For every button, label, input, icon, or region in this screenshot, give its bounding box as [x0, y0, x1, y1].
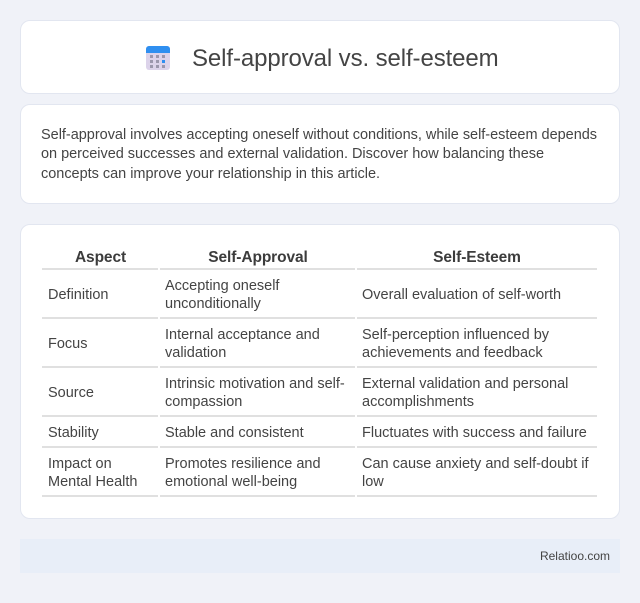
row: Source [48, 376, 568, 410]
row: Impact on Mental Health [48, 456, 589, 490]
row: Definition [48, 278, 561, 312]
row: Stability [48, 425, 587, 441]
row: Source: compassion [165, 394, 242, 410]
row: Focus: Internal acceptance and [165, 327, 320, 343]
intro text [41, 127, 597, 182]
intro text: concepts can improve your relationship in this article. [41, 166, 380, 182]
row: Impact on Mental Health: low [362, 474, 384, 490]
intro text: on perceived successes and external validation. Discover how balancing these [41, 146, 544, 162]
row: Focus [48, 327, 549, 361]
title: Self-approval vs. self-esteem [192, 45, 499, 72]
intro text: Self-approval involves accepting oneself without conditions, while self-esteem depends [41, 127, 597, 143]
row: Stability: Fluctuates with success and failure [362, 425, 587, 441]
row: Source: accomplishments [362, 394, 474, 410]
row: Focus: Self-perception influenced by [362, 327, 549, 343]
row: Source: Source [48, 385, 94, 401]
row: Definition: Accepting oneself [165, 278, 279, 294]
row: Impact on Mental Health: Mental Health [48, 474, 137, 490]
panel: title card [20, 20, 620, 94]
icon: calendar [146, 46, 170, 70]
row: Source: External validation and personal [362, 376, 568, 392]
row: Definition: Overall evaluation of self-worth [362, 287, 561, 303]
footer credit: Relatioo.com [540, 549, 610, 563]
footer bar [20, 539, 620, 573]
row: Definition: Definition [48, 287, 108, 303]
row: Stability: Stability [48, 425, 99, 441]
row: Definition: unconditionally [165, 296, 261, 312]
header: Aspect: Aspect [75, 249, 126, 266]
row: Impact on Mental Health: Promotes resilience and [165, 456, 321, 472]
header: Self-Esteem: Self-Esteem [433, 249, 521, 266]
header: Self-Approval: Self-Approval [208, 249, 308, 266]
row: Impact on Mental Health: emotional well-being [165, 474, 297, 490]
row: Impact on Mental Health: Impact on [48, 456, 112, 472]
row: Focus: validation [165, 345, 226, 361]
row: Impact on Mental Health: Can cause anxiety and self-doubt if [362, 456, 588, 472]
row: Source: Intrinsic motivation and self- [165, 376, 345, 392]
row: Focus: Focus [48, 336, 88, 352]
panel: comparison table card [20, 224, 620, 519]
row: Focus: achievements and feedback [362, 345, 543, 361]
row: Stability: Stable and consistent [165, 425, 304, 441]
panel: intro card [20, 104, 620, 204]
